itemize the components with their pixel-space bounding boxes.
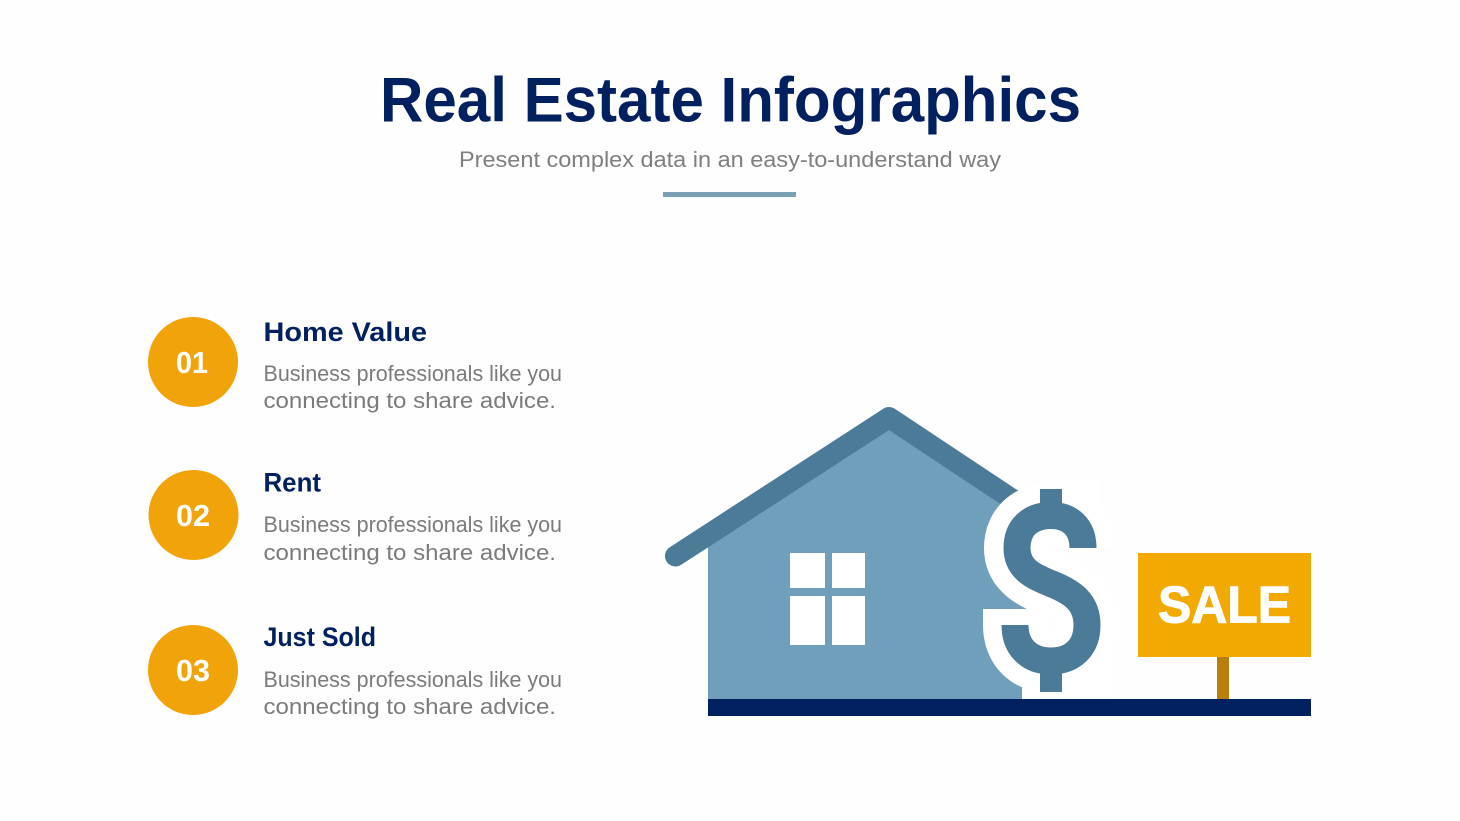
description 02: connecting to share advice.: [264, 540, 556, 565]
description 03: Business professionals like you: [264, 667, 562, 692]
roof: [676, 418, 1045, 556]
item 01: home value: [148, 317, 562, 413]
description 02: [264, 512, 562, 565]
description 01: connecting to share advice.: [264, 388, 556, 413]
subtitle: Present complex data in an easy-to-understand way: [459, 147, 1002, 172]
description 01: Business professionals like you: [264, 361, 562, 386]
number badge 02: [148, 470, 238, 560]
dollar halo: [1015, 480, 1112, 699]
title: Real Estate Infographics: [380, 66, 1081, 136]
ground line: [708, 699, 1311, 716]
number badge 01: 01: [176, 345, 208, 380]
description 03: [264, 667, 562, 719]
description 03: connecting to share advice.: [264, 694, 556, 719]
heading: just sold: Just Sold: [264, 622, 376, 652]
window: [790, 553, 865, 645]
header divider: [663, 192, 796, 197]
header: [380, 66, 1081, 197]
number badge 03: 03: [176, 653, 210, 688]
item 02: rent: [148, 468, 562, 565]
heading: rent: Rent: [264, 468, 321, 498]
number badge 01: [148, 317, 238, 407]
sale sign: [1138, 553, 1311, 699]
number badge 03: [148, 625, 238, 715]
dollar icon: [1015, 489, 1087, 692]
description 01: [264, 361, 562, 413]
description 02: Business professionals like you: [264, 512, 562, 537]
item 03: just sold: [148, 622, 562, 719]
heading: home value: Home Value: [264, 317, 427, 347]
house body: [708, 425, 1030, 699]
illustration: house with dollar and sale sign: [676, 418, 1311, 716]
number badge 02: 02: [176, 498, 210, 533]
sale sign: SALE: [1158, 576, 1291, 634]
